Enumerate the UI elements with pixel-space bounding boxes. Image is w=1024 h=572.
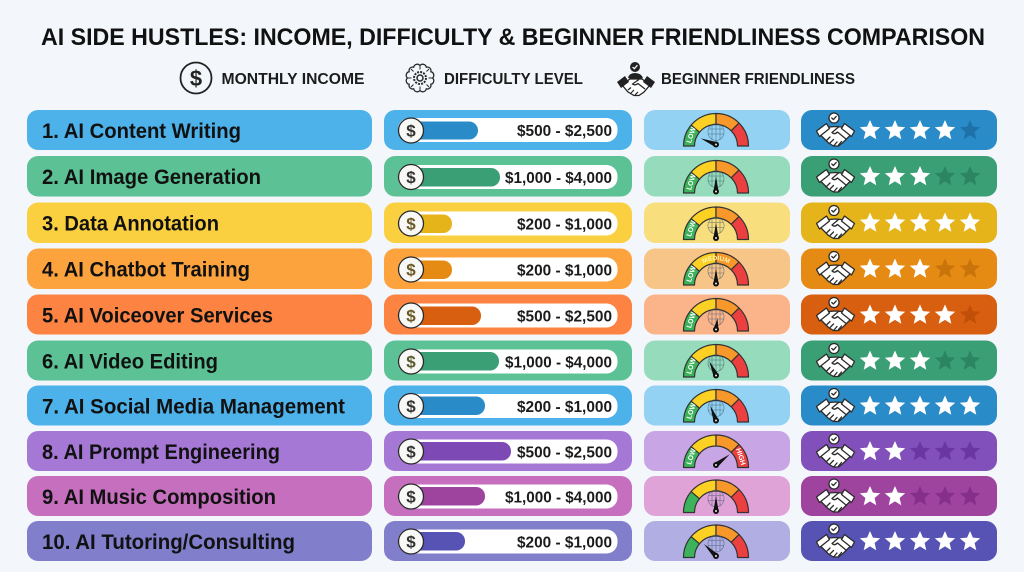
beginner rating <box>801 248 997 289</box>
name pill <box>27 156 372 196</box>
income bar: $ <box>406 352 416 372</box>
row 3: Data Annotation <box>27 202 997 243</box>
income bar: $ <box>406 397 416 416</box>
difficulty gauge: LOW <box>686 311 698 329</box>
beginner rating <box>801 202 997 243</box>
name pill <box>27 386 372 426</box>
name pill <box>27 202 372 243</box>
name pill: 8. AI Prompt Engineering <box>42 441 280 464</box>
row 6: AI Video Editing <box>27 340 997 380</box>
row 8: AI Prompt Engineering <box>27 431 997 471</box>
row 10: AI Tutoring/Consulting <box>27 521 997 561</box>
income bar <box>384 386 632 426</box>
difficulty gauge <box>644 386 790 426</box>
legend item: beginner friendliness <box>617 62 855 96</box>
difficulty gauge <box>644 294 790 334</box>
income bar: $ <box>406 442 416 462</box>
name pill <box>27 521 372 561</box>
name pill: 1. AI Content Writing <box>42 120 241 143</box>
income bar: $200 - $1,000 <box>517 262 612 280</box>
difficulty gauge <box>644 476 790 516</box>
difficulty gauge <box>644 248 790 289</box>
income bar: $500 - $2,500 <box>517 308 612 326</box>
beginner rating <box>801 431 997 471</box>
income bar <box>384 202 632 243</box>
difficulty gauge: LOW <box>686 448 698 466</box>
income bar <box>384 248 632 289</box>
income bar: $500 - $2,500 <box>517 444 612 462</box>
legend item: beginner friendliness: BEGINNER FRIENDLINESS <box>661 71 855 88</box>
row 9: AI Music Composition <box>27 476 997 516</box>
legend item: difficulty level: DIFFICULTY LEVEL <box>444 71 583 88</box>
difficulty gauge <box>644 156 790 196</box>
legend item: monthly income <box>180 62 364 94</box>
name pill <box>27 431 372 471</box>
row 5: AI Voiceover Services <box>27 294 997 334</box>
income bar: $ <box>406 168 416 187</box>
legend item: difficulty level <box>406 64 583 92</box>
difficulty gauge <box>644 202 790 243</box>
name pill <box>27 294 372 334</box>
income bar: $ <box>406 306 416 326</box>
name pill <box>27 340 372 380</box>
income bar: $ <box>406 488 416 506</box>
beginner rating <box>801 340 997 380</box>
name pill <box>27 476 372 516</box>
name pill: 6. AI Video Editing <box>42 350 218 374</box>
beginner rating <box>801 110 997 150</box>
row 4: AI Chatbot Training <box>27 248 997 289</box>
row 2: AI Image Generation <box>27 156 997 196</box>
name pill: 10. AI Tutoring/Consulting <box>42 531 295 554</box>
income bar: $500 - $2,500 <box>517 123 612 140</box>
name pill <box>27 110 372 150</box>
income bar: $ <box>406 532 416 552</box>
income bar: $1,000 - $4,000 <box>505 354 612 372</box>
income bar <box>384 110 632 150</box>
income bar <box>384 156 632 196</box>
difficulty gauge: LOW <box>686 220 698 238</box>
beginner rating <box>801 476 997 516</box>
name pill: 3. Data Annotation <box>42 212 219 236</box>
name pill: 9. AI Music Composition <box>42 486 276 509</box>
difficulty gauge <box>644 110 790 150</box>
title: AI SIDE HUSTLES: INCOME, DIFFICULTY & BEGINNER FRIENDLINESS COMPARISON <box>41 24 985 51</box>
difficulty gauge: LOW <box>686 126 698 144</box>
income bar <box>384 431 632 471</box>
row 1: AI Content Writing <box>27 110 997 150</box>
legend <box>180 62 855 96</box>
income bar: $ <box>406 260 416 280</box>
name pill: 5. AI Voiceover Services <box>42 304 273 328</box>
difficulty gauge <box>644 521 790 561</box>
income bar: $ <box>406 214 416 234</box>
name pill: 2. AI Image Generation <box>42 166 261 189</box>
income bar: $200 - $1,000 <box>517 399 612 416</box>
income bar <box>384 476 632 516</box>
name pill: 7. AI Social Media Management <box>42 396 345 418</box>
income bar: $ <box>406 122 416 140</box>
income bar: $200 - $1,000 <box>517 534 612 552</box>
income bar <box>384 521 632 561</box>
income bar: $200 - $1,000 <box>517 216 612 234</box>
difficulty gauge <box>644 431 790 471</box>
legend item: monthly income: MONTHLY INCOME <box>222 71 364 88</box>
difficulty gauge: MEDIUM <box>702 256 730 264</box>
legend item: monthly income: $ <box>190 66 202 91</box>
beginner rating <box>801 156 997 196</box>
beginner rating <box>801 521 997 561</box>
beginner rating <box>801 294 997 334</box>
income bar: $1,000 - $4,000 <box>505 170 612 187</box>
difficulty gauge: LOW <box>686 402 698 420</box>
difficulty gauge: LOW <box>686 173 698 191</box>
income bar: $1,000 - $4,000 <box>505 490 612 506</box>
difficulty gauge <box>644 340 790 380</box>
row 7: AI Social Media Management <box>27 386 997 426</box>
difficulty gauge: LOW <box>686 357 698 375</box>
difficulty gauge: LOW <box>686 265 698 283</box>
difficulty gauge: HIGH <box>734 447 746 466</box>
name pill: 4. AI Chatbot Training <box>42 258 250 282</box>
name pill <box>27 248 372 289</box>
income bar <box>384 294 632 334</box>
income bar <box>384 340 632 380</box>
beginner rating <box>801 386 997 426</box>
